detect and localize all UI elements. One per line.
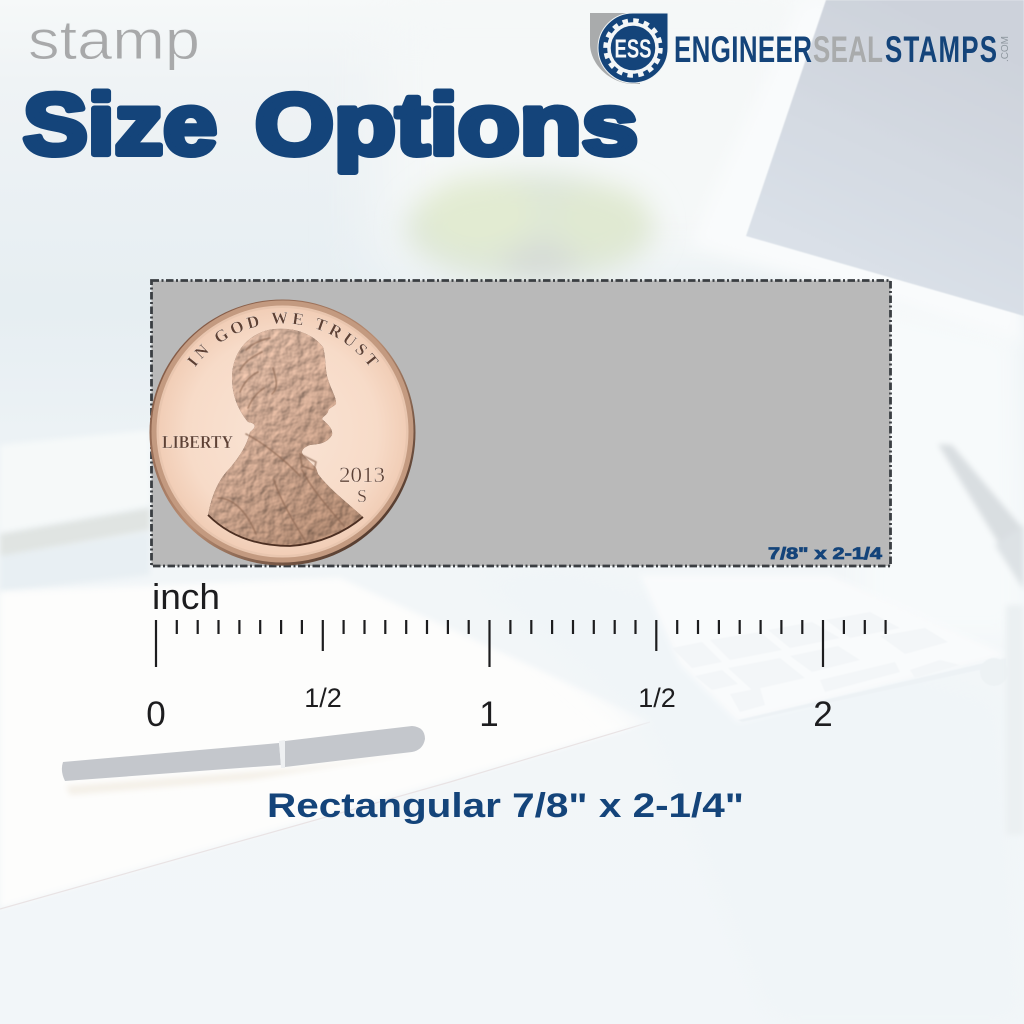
logo wordmark: SEAL <box>813 28 883 70</box>
penny bust <box>208 329 363 546</box>
ruler numbers: 1/2 <box>638 683 676 713</box>
logo emblem: ESS <box>614 34 652 64</box>
paper on desk <box>0 578 652 909</box>
ruler numbers: 2 <box>813 695 833 734</box>
window sill band <box>0 430 150 592</box>
stamp impression area <box>152 280 890 566</box>
title: Size Options: Size <box>23 77 217 173</box>
desk shade <box>470 565 1024 1024</box>
penny inscriptions: IN GOD WE TRUST <box>186 312 380 368</box>
logo wordmark: ENGINEER <box>674 28 812 70</box>
ruler numbers: 1 <box>479 695 499 734</box>
title: Size Options: Options <box>255 77 638 173</box>
ruler numbers: 1/2 <box>304 683 342 713</box>
ruler numbers <box>146 683 833 734</box>
size label: 7/8" x 2-1/4 <box>768 544 883 563</box>
icon: penny for scale <box>150 300 416 566</box>
logo wordmark: STAMPS <box>885 28 997 70</box>
subtitle: stamp: stamp <box>28 8 200 71</box>
ruler <box>146 576 886 734</box>
pen <box>62 726 425 795</box>
pencil cup <box>938 444 1024 835</box>
penny inscriptions: LIBERTY <box>162 432 233 452</box>
penny inscriptions: 2013 <box>339 462 385 487</box>
logo: Engineer Seal Stamps <box>590 13 1011 84</box>
title: Size Options <box>23 77 638 173</box>
caption: Rectangular 7/8" x 2-1/4" <box>267 787 744 825</box>
logo wordmark <box>674 28 1011 70</box>
keyboard <box>640 575 1008 722</box>
unit label: inch <box>152 576 220 617</box>
penny inscriptions: S <box>357 486 367 506</box>
penny inscriptions <box>162 312 385 506</box>
monitor <box>690 0 1024 345</box>
logo wordmark: .COM <box>1000 36 1011 62</box>
plant <box>405 173 655 283</box>
ruler ticks <box>156 620 886 667</box>
ruler numbers: 0 <box>146 695 166 734</box>
logo emblem <box>590 13 668 84</box>
